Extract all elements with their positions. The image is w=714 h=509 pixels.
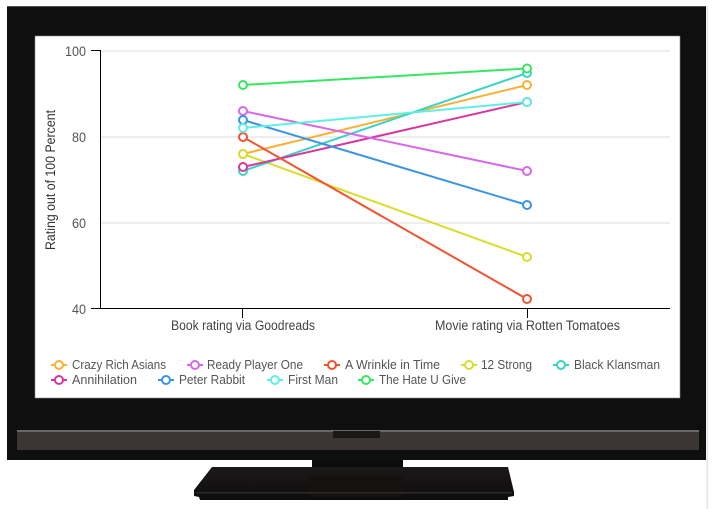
legend item: The Hate U Give: The Hate U Give: [379, 373, 466, 387]
screen panel: [35, 36, 680, 398]
series: Peter Rabbit: [239, 116, 531, 209]
series: Annihilation: [239, 98, 531, 171]
y axis title: Rating out of 100 Percent: [43, 110, 58, 250]
x axis label: movie: Movie rating via Rotten Tomatoes: [435, 318, 620, 333]
y axis labels: 80: [72, 130, 86, 145]
y axis labels: 100: [65, 44, 86, 59]
legend: [51, 358, 660, 387]
x axis label: book: Book rating via Goodreads: [171, 318, 315, 333]
grid lines and axes: [91, 50, 670, 318]
legend item: 12 Strong: 12 Strong: [481, 358, 532, 372]
legend item: Annihilation: Annihilation: [72, 373, 137, 387]
chart: slope chart of ratings: [43, 44, 670, 333]
icon: TV stand: [194, 458, 514, 500]
legend item: Peter Rabbit: Peter Rabbit: [179, 373, 245, 387]
series: Black Klansman: [239, 69, 531, 175]
y axis labels: [65, 44, 86, 317]
y axis labels: 40: [72, 302, 86, 317]
legend item: Ready Player One: Ready Player One: [207, 358, 303, 372]
legend item: Black Klansman: Black Klansman: [574, 358, 660, 372]
series: Ready Player One: [239, 107, 531, 175]
series: The Hate U Give: [239, 64, 531, 89]
legend item: First Man: [267, 373, 338, 387]
legend item: Crazy Rich Asians: Crazy Rich Asians: [72, 358, 166, 372]
series: A Wrinkle in Time: [239, 133, 531, 303]
y axis labels: 60: [72, 216, 86, 231]
legend item: First Man: First Man: [288, 373, 338, 387]
series: Crazy Rich Asians: [239, 81, 531, 158]
legend item: A Wrinkle in Time: A Wrinkle in Time: [345, 358, 440, 372]
series: First Man: [239, 98, 531, 132]
series: 12 Strong: [239, 150, 531, 261]
legend item: 12 Strong: [461, 358, 532, 372]
